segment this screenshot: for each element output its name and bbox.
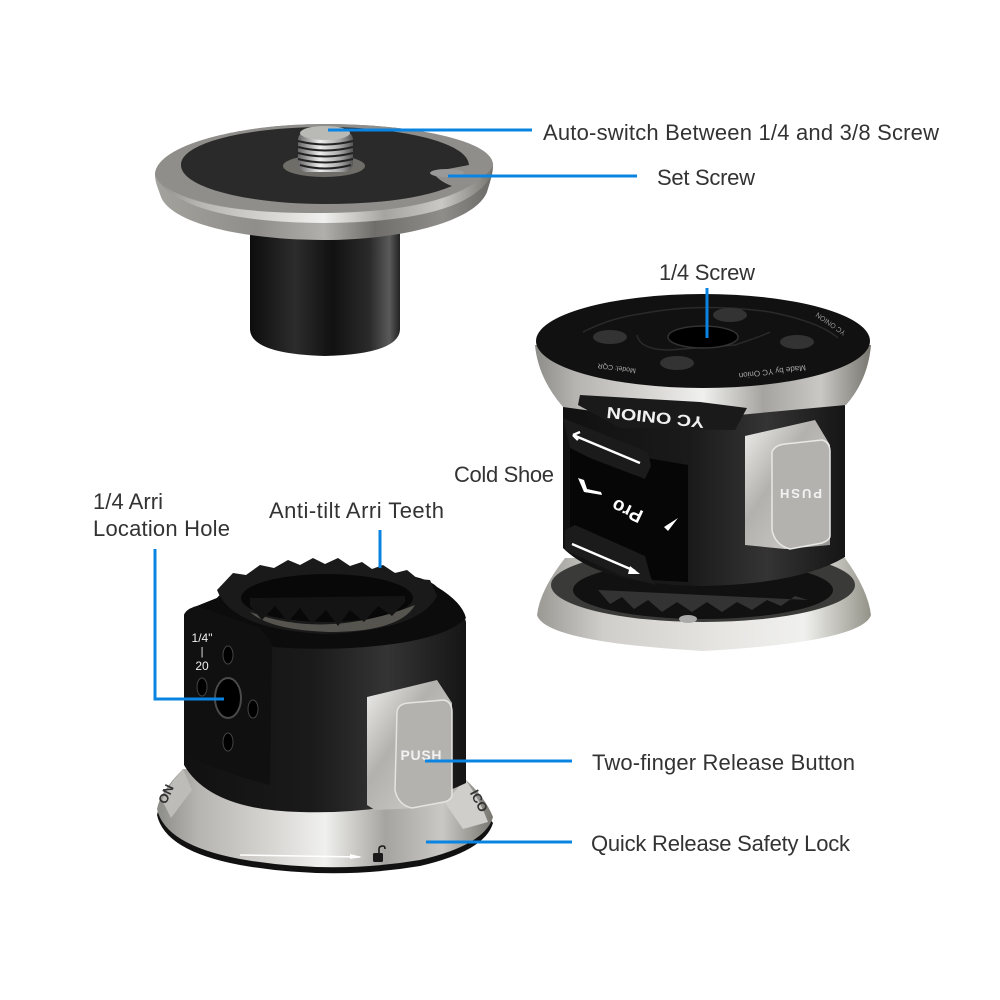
body top face — [197, 568, 466, 649]
ring black underside — [157, 775, 493, 873]
cold shoe recess — [570, 445, 688, 582]
upper rail arrow — [573, 432, 640, 463]
ring engraving left: ON — [155, 782, 177, 806]
left flat panel — [184, 606, 272, 785]
anti-tilt teeth — [598, 590, 808, 612]
icon: set screw — [430, 169, 464, 177]
button face — [395, 700, 452, 808]
black body — [184, 568, 466, 812]
ring right facet — [445, 779, 488, 829]
product: top mounting plate with screw — [155, 124, 493, 356]
text: 1/4 inch 20 marking: 1/4" — [192, 631, 212, 645]
screw collar — [283, 155, 365, 177]
text: 1/4 inch 20 marking: 20 — [195, 659, 209, 673]
label: auto-switch screw: Auto-switch Between 1/4 and 3/8 Screw — [543, 120, 939, 145]
leader line: 1/4 screw — [706, 288, 708, 338]
tiny disc text left: Model: CQR — [597, 361, 636, 374]
base inner recess — [573, 561, 833, 619]
label: 1/4 Arri location hole: 1/4 Arri — [93, 489, 163, 514]
silver safety lock ring — [157, 769, 493, 867]
text: YC ONION: YC ONION — [606, 403, 705, 430]
leader line: set screw — [448, 174, 637, 178]
leader line: safety lock — [426, 840, 572, 844]
product: quick release clamp with Arri teeth — [155, 558, 493, 873]
leader line: release button — [425, 760, 572, 762]
small base screw — [679, 615, 697, 623]
text: PUSH: PUSH — [400, 747, 442, 763]
push button — [367, 680, 452, 810]
text: Pro marking: Pro — [609, 494, 646, 526]
leader line: location hole — [155, 549, 224, 699]
black cylinder stem — [250, 232, 400, 356]
text: 1/4 inch 20 marking: | — [201, 646, 203, 658]
threaded screw — [298, 126, 353, 172]
label: set screw: Set Screw — [657, 165, 755, 190]
label: release button: Two-finger Release Button — [592, 750, 855, 775]
base top surface — [551, 548, 855, 622]
label: cold shoe: Cold Shoe — [454, 462, 554, 487]
arri location holes — [197, 646, 258, 751]
button face — [772, 440, 830, 549]
label: safety lock: Quick Release Safety Lock — [591, 831, 851, 856]
lower cold shoe rail — [565, 525, 656, 585]
label: 1/4 screw: 1/4 Screw — [659, 260, 755, 285]
lower rail arrow — [572, 544, 635, 571]
ring left facet — [162, 769, 192, 818]
text: PUSH: PUSH — [780, 486, 822, 501]
flange highlight band — [156, 168, 492, 223]
text: 1/4 inch 20 marking — [192, 631, 212, 673]
black body — [563, 395, 845, 586]
silver base flare — [537, 558, 871, 651]
silver collar under disc — [535, 345, 871, 418]
ring arrow — [240, 855, 360, 857]
center recess outline — [637, 332, 770, 350]
upper cold shoe rail — [563, 418, 651, 479]
tiny disc text right: Made by YC Onion — [738, 363, 806, 380]
tiny disc logo: YC ONION — [815, 310, 847, 336]
inner teeth — [250, 596, 405, 626]
flange top ring — [155, 124, 493, 214]
push button — [745, 420, 830, 549]
wedge with brand name — [578, 395, 747, 430]
chevron left — [578, 478, 602, 495]
1/4 screw hole — [668, 326, 738, 348]
disc inner outline — [583, 307, 838, 338]
icon: unlocked padlock — [373, 846, 385, 862]
dark top plate with set screw notch — [181, 127, 469, 204]
ring engraving right: ICO — [467, 787, 491, 815]
black top disc — [536, 294, 870, 388]
chevron right — [664, 518, 678, 531]
teeth outer crown — [217, 558, 437, 634]
disc bumps — [593, 308, 814, 370]
silver flange outline — [155, 124, 493, 240]
inner recess — [241, 574, 413, 622]
label: anti-tilt teeth: Anti-tilt Arri Teeth — [269, 498, 444, 523]
label: 1/4 Arri location hole: Location Hole — [93, 516, 230, 541]
leader line: anti-tilt teeth — [378, 530, 382, 568]
leader line: auto-switch screw — [328, 128, 532, 132]
product: quick release body with cold shoe — [535, 294, 871, 651]
label: 1/4 Arri location hole — [93, 489, 230, 541]
inner grey crescent — [250, 605, 415, 632]
